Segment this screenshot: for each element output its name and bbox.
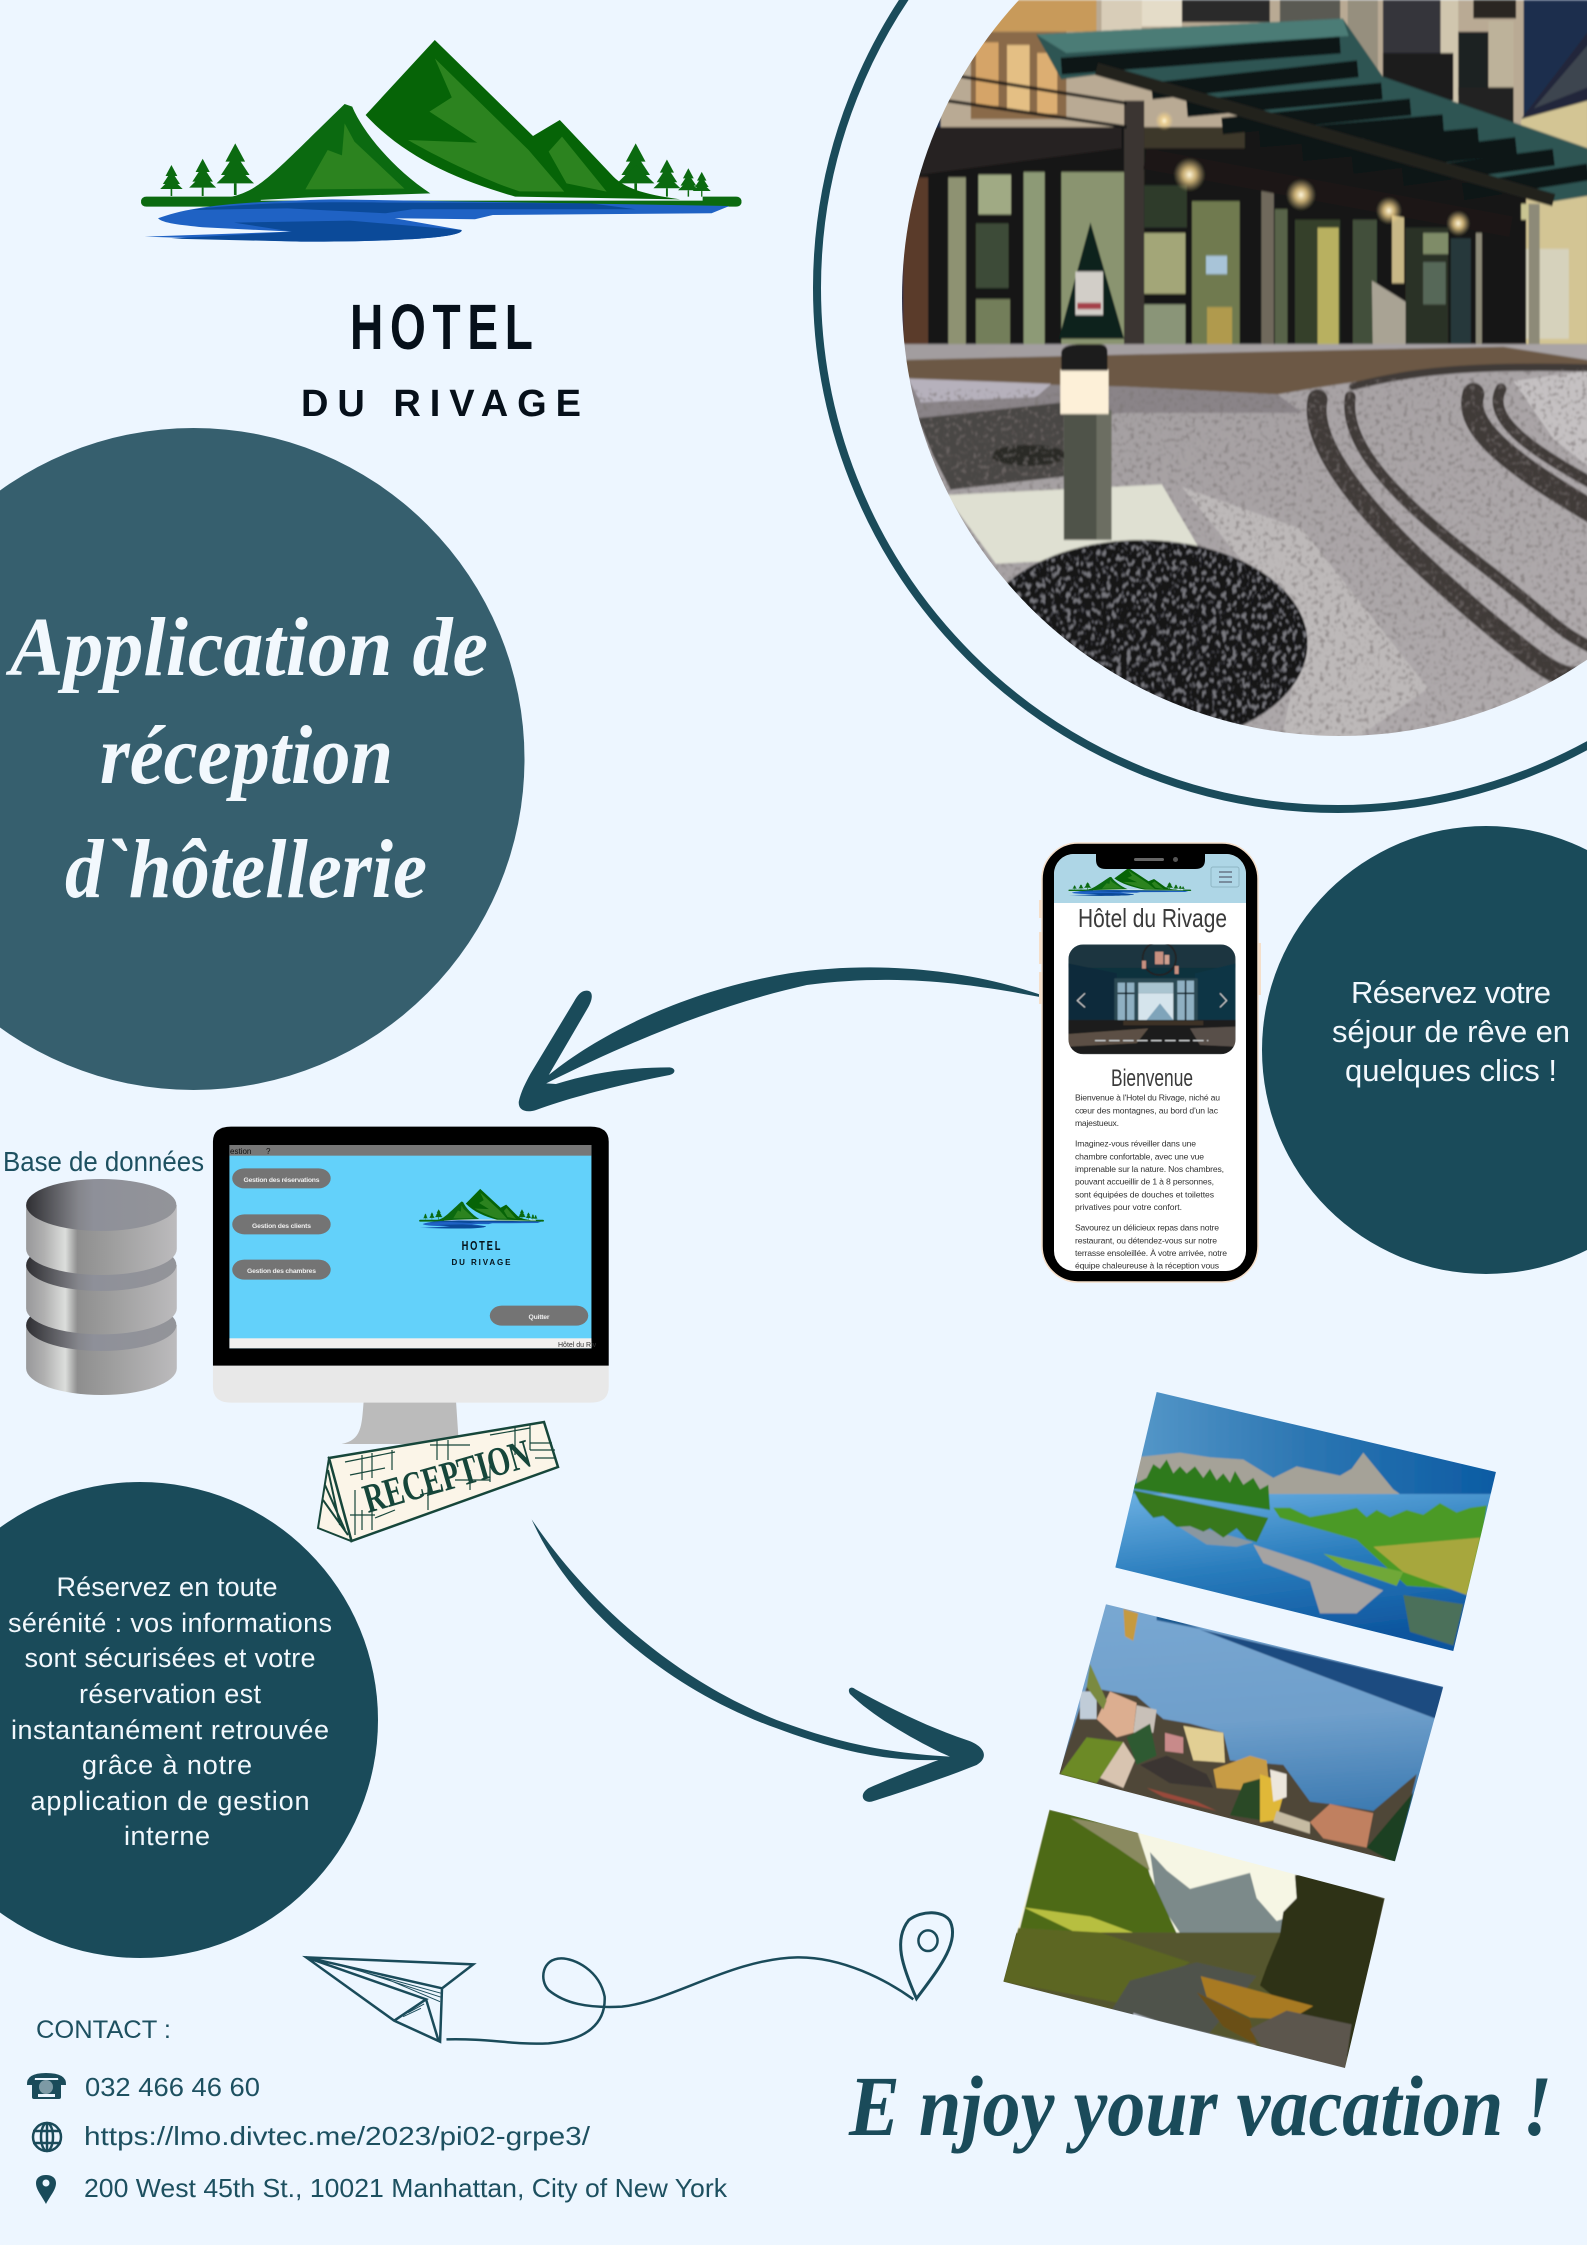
desktop monitor with reception app: Gestion des clients	[252, 1223, 311, 1230]
circle: security message: Réservez en toute	[56, 1572, 278, 1602]
circle: application title: Application de	[5, 601, 488, 694]
circle: booking message	[1262, 826, 1587, 1274]
circular hotel photo	[902, 0, 1587, 736]
circle: security message: grâce à notre	[82, 1750, 252, 1780]
phone mockup with website: Bienvenue à l'Hotel du Rivage, niché au	[1075, 1093, 1220, 1103]
phone mockup with website: imprenable sur la nature. Nos chambres,	[1075, 1164, 1224, 1174]
phone number: 032 466 46 60	[85, 2072, 260, 2102]
desktop monitor with reception app: Gestion des chambres	[247, 1268, 316, 1275]
circle: security message	[0, 1482, 378, 1958]
database cylinder icon	[26, 1179, 177, 1395]
phone mockup with website: pouvant accueillir de 1 à 8 personnes,	[1075, 1177, 1214, 1187]
phone mockup with website: sont équipées de douches et toilettes	[1075, 1189, 1214, 1199]
circle: booking message: Réservez votre	[1351, 975, 1551, 1010]
logo: mountains, trees and lake	[141, 40, 741, 242]
logo wordmark: DU RIVAGE	[301, 383, 581, 425]
arrow: phone to monitor	[519, 967, 1043, 1111]
desktop monitor with reception app: Quitter	[528, 1314, 550, 1321]
circle: security message: réservation est	[79, 1679, 261, 1709]
desktop monitor with reception app: estion	[230, 1147, 251, 1156]
circle: security message: sont sécurisées et votre	[24, 1643, 316, 1673]
phone mockup with website: cœur des montagnes, au bord d'un lac	[1075, 1105, 1219, 1115]
logo wordmark	[301, 292, 581, 425]
phone mockup with website: privatives pour votre confort.	[1075, 1202, 1182, 1212]
phone mockup with website: Bienvenue	[1111, 1065, 1193, 1092]
landscape photo collage	[1000, 1388, 1500, 2073]
desktop monitor with reception app: DU RIVAGE	[452, 1258, 511, 1267]
phone mockup with website: équipe chaleureuse à la réception vous	[1075, 1261, 1219, 1271]
desktop monitor with reception app: ?	[266, 1147, 271, 1156]
phone mockup with website: restaurant, ou détendez-vous sur notre	[1075, 1235, 1217, 1245]
phone mockup with website: terrasse ensoleillée. À votre arrivée, notre	[1075, 1248, 1227, 1258]
phone mockup with website: Hôtel du Rivage	[1078, 903, 1227, 933]
phone mockup with website: Savourez un délicieux repas dans notre	[1075, 1223, 1219, 1233]
circle: security message: instantanément retrouvée	[11, 1715, 329, 1745]
logo wordmark: HOTEL	[350, 292, 533, 363]
phone mockup with website: Imaginez-vous réveiller dans une	[1075, 1139, 1196, 1149]
circle: booking message: séjour de rêve en	[1332, 1014, 1570, 1049]
icon: telephone	[27, 2073, 66, 2099]
circle: application title: réception	[100, 709, 393, 802]
circle: security message: interne	[124, 1821, 210, 1851]
hotel photo ring	[817, 0, 1587, 809]
desktop monitor with reception app: HOTEL	[462, 1240, 501, 1253]
label: base de données: Base de données	[3, 1146, 204, 1177]
circle: application title: d`hôtellerie	[65, 823, 427, 916]
icon: location pin	[36, 2175, 56, 2204]
arrow: monitor to landscapes	[532, 1519, 984, 1802]
phone mockup with website	[1039, 843, 1261, 1282]
desktop monitor with reception app	[213, 1127, 609, 1444]
circle: security message: sérénité : vos informations	[8, 1608, 332, 1638]
paper plane with looping flight path	[306, 1913, 953, 2044]
circle: security message: application de gestion	[30, 1786, 310, 1816]
icon: globe	[33, 2123, 61, 2151]
contact heading: CONTACT :	[36, 2016, 171, 2044]
phone mockup with website: majestueux.	[1075, 1118, 1119, 1128]
circle: application title	[0, 428, 524, 1090]
circle: booking message: quelques clics !	[1345, 1053, 1557, 1088]
phone mockup with website: chambre confortable, avec une vue	[1075, 1151, 1204, 1161]
address: 200 West 45th St., 10021 Manhattan, City of New York	[84, 2173, 728, 2203]
desktop monitor with reception app: Gestion des réservations	[244, 1177, 320, 1184]
website url: https://lmo.divtec.me/2023/pi02-grpe3/	[84, 2121, 591, 2151]
reception desk sign: RECEPTION	[358, 1430, 536, 1522]
desktop monitor with reception app: Hôtel du Riv	[558, 1342, 597, 1349]
reception desk sign	[318, 1422, 558, 1541]
